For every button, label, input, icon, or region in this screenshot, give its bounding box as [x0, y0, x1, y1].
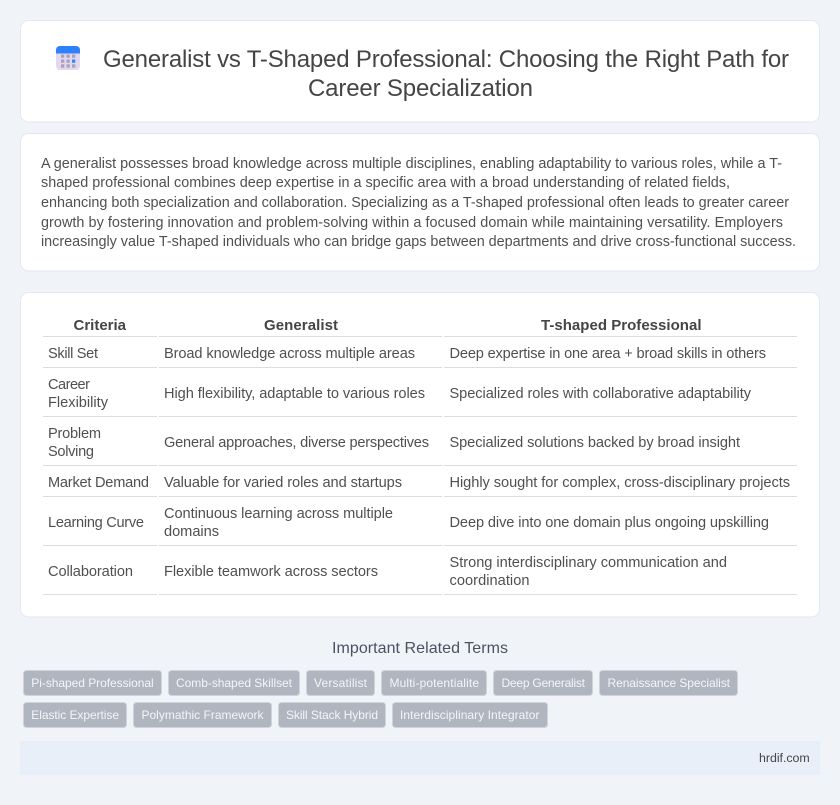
row: market demand: Valuable for varied roles and startups [164, 475, 402, 491]
row: problem solving: General approaches, diverse perspectives [164, 435, 429, 451]
title [103, 46, 789, 102]
row: collaboration: Strong interdisciplinary communication and [450, 555, 727, 571]
tag group: related terms: Skill Stack Hybrid [286, 708, 378, 722]
row: skill set: Skill Set [48, 346, 98, 362]
table header row: Generalist [264, 317, 338, 334]
tag group: related terms: Elastic Expertise [31, 708, 119, 722]
row: learning curve: Learning Curve [48, 515, 144, 531]
row: collaboration: Flexible teamwork across sectors [164, 564, 378, 580]
row: skill set [48, 346, 766, 362]
row: learning curve: Deep dive into one domain plus ongoing upskilling [450, 515, 769, 531]
panel: introduction text [20, 134, 820, 271]
row: career flexibility [48, 377, 752, 411]
row: career flexibility: Flexibility [48, 395, 109, 411]
tag group: related terms: Comb-shaped Skillset [176, 676, 293, 690]
row: career flexibility: High flexibility, adaptable to various roles [164, 386, 425, 402]
text block: description: increasingly value T-shaped individuals who can bridge gaps between departments and drive cross-functional success. [41, 234, 796, 250]
row: learning curve: Continuous learning across multiple [164, 506, 393, 522]
row: career flexibility: Specialized roles with collaborative adaptability [450, 386, 752, 402]
tag group: related terms: Versatilist [314, 676, 368, 690]
tag group: related terms: Renaissance Specialist [608, 676, 731, 690]
row: problem solving: Solving [48, 444, 94, 460]
text block: description: enhancing both specialization and collaboration. Specializing as a T-shaped professional often leads to greater career [41, 195, 789, 211]
footer bar [20, 741, 820, 775]
panel: title header [20, 20, 820, 122]
row: collaboration: Collaboration [48, 564, 133, 580]
row: skill set: Broad knowledge across multiple areas [164, 346, 415, 362]
row: market demand [48, 475, 790, 491]
text block: description: A generalist possesses broad knowledge across multiple disciplines, enabling adaptability to various roles, while a T- [41, 156, 782, 172]
row: skill set: Deep expertise in one area + broad skills in others [450, 346, 766, 362]
row: problem solving: Problem [48, 426, 101, 442]
panel: comparison table [20, 292, 820, 617]
row: learning curve [48, 506, 769, 540]
text block: description: shaped professional combines deep expertise in a specific area with a broad understanding of related fields, [41, 175, 730, 191]
row: market demand: Market Demand [48, 475, 149, 491]
tag group: related terms: Pi-shaped Professional [31, 676, 154, 690]
row: learning curve: domains [164, 524, 219, 540]
title: Career Specialization [308, 75, 533, 102]
table header row: T-shaped Professional [541, 317, 702, 334]
title: Generalist vs T-Shaped Professional: Choosing the Right Path for [103, 46, 789, 73]
footer bar: hrdif.com [759, 751, 810, 765]
tag group: related terms: Interdisciplinary Integrator [400, 708, 540, 722]
row: problem solving: Specialized solutions backed by broad insight [450, 435, 740, 451]
text block: description: growth by fostering innovation and problem-solving within a focused domain while maintaining versatility. Employers [41, 215, 783, 231]
heading: important related terms: Important Related Terms [332, 640, 508, 657]
icon: calendar [56, 46, 80, 70]
tag group: related terms: Multi-potentialite [390, 676, 479, 690]
table header row [74, 317, 702, 334]
row: collaboration [48, 555, 727, 589]
row: market demand: Highly sought for complex, cross-disciplinary projects [450, 475, 790, 491]
row: problem solving [48, 426, 740, 460]
tag group: related terms [24, 670, 738, 728]
table header row: Criteria [74, 317, 127, 334]
tag group: related terms: Polymathic Framework [142, 708, 264, 722]
tag group: related terms: Deep Generalist [502, 676, 586, 690]
row: collaboration: coordination [450, 573, 530, 589]
row: career flexibility: Career [48, 377, 90, 393]
text block: description [41, 156, 796, 250]
